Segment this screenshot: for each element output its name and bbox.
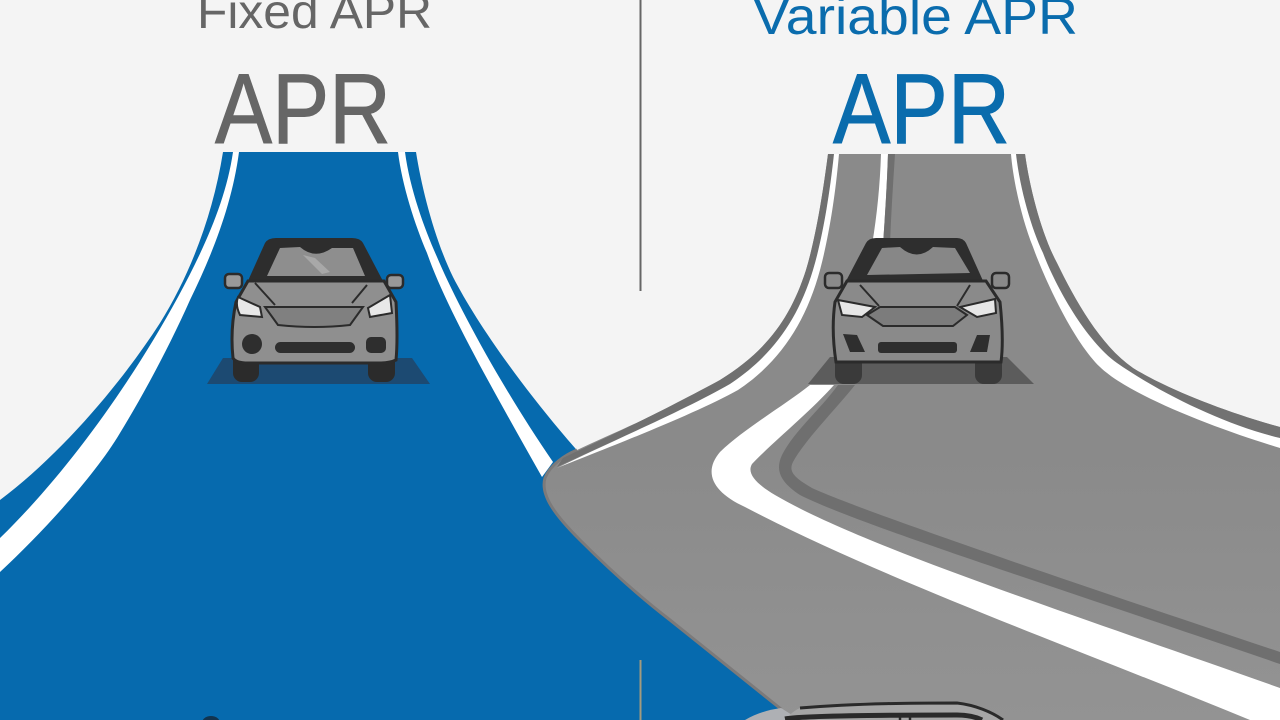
mirrors [225, 274, 242, 288]
fixed road [0, 152, 800, 720]
windshield highlight [303, 255, 330, 274]
left white lane line [0, 152, 239, 572]
center dark line lower [779, 385, 1280, 664]
body [833, 281, 1002, 362]
center dark line top [883, 154, 895, 245]
body [232, 281, 397, 363]
cabin [247, 238, 384, 283]
windshield [267, 247, 365, 276]
headlights [838, 300, 875, 317]
hood lines [860, 285, 970, 306]
variable road [544, 154, 1280, 720]
roof band [785, 703, 1003, 720]
center white line lower [712, 385, 1280, 720]
grille [867, 307, 967, 326]
label: APR blue: APR [833, 53, 1010, 164]
lower roof line [785, 715, 982, 720]
center white line top [872, 154, 888, 245]
silver roof edge [745, 708, 800, 720]
upper roof line [800, 703, 1003, 720]
wheels [835, 355, 862, 384]
road left border [544, 450, 781, 709]
wheels [233, 350, 259, 382]
right white lane line [1011, 154, 1280, 448]
left dark edge [557, 154, 834, 467]
mirrors [825, 273, 842, 288]
bumper vents [843, 334, 990, 353]
car on variable road [808, 238, 1034, 384]
grille [265, 307, 363, 327]
car on fixed road [207, 238, 430, 384]
hood lines [255, 283, 367, 305]
left white lane line [557, 154, 839, 468]
right dark edge [1016, 154, 1280, 438]
windshield [867, 247, 970, 275]
divider bottom [640, 660, 642, 720]
window pillars [900, 714, 910, 720]
road surface [544, 154, 1280, 720]
shadow [207, 358, 430, 384]
right white lane line [398, 152, 553, 477]
label: APR gray: APR [215, 53, 391, 164]
center divider top [640, 0, 642, 291]
shadow [808, 357, 1034, 384]
bottom dark element [202, 716, 220, 720]
bumper vents [242, 334, 386, 354]
road surface [0, 152, 800, 720]
bottom car roof [745, 703, 1003, 720]
cabin [845, 238, 984, 283]
headlights [237, 297, 262, 317]
